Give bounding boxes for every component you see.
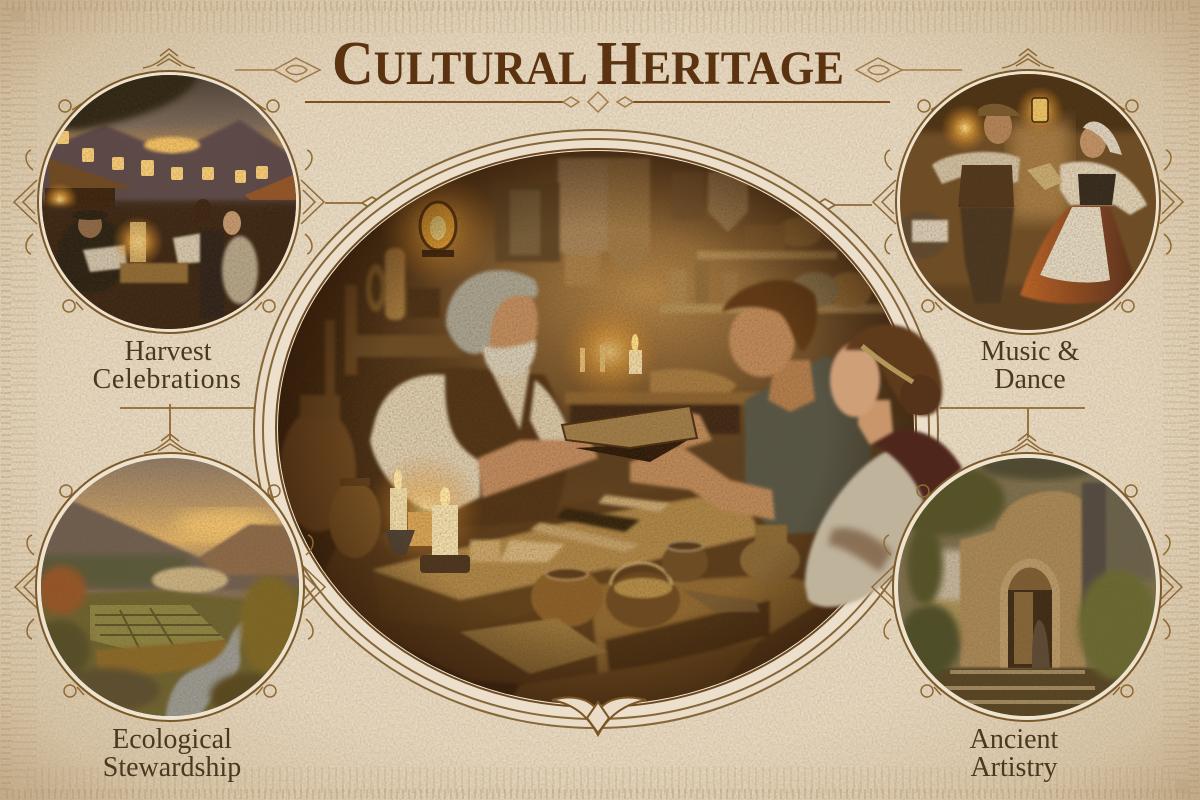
pots and basket on the table (460, 525, 800, 674)
bench candles (580, 334, 642, 374)
ornaments: music circle (873, 49, 1183, 312)
hanging tools (325, 248, 462, 410)
carved box (562, 406, 697, 462)
bottom ornament of the central frame (552, 698, 646, 735)
jars on left (280, 395, 356, 532)
old man (370, 270, 598, 530)
label: harvest celebrations: Celebrations (93, 364, 241, 395)
label: ecological stewardship: Stewardship (103, 752, 241, 783)
painterly grain (278, 151, 914, 670)
label: ancient artistry: Artistry (970, 752, 1058, 783)
table tools (470, 495, 670, 562)
frame connectors between the circles and the central scene (120, 197, 1085, 440)
lantern (420, 202, 456, 257)
ornaments: ancient circle (872, 434, 1182, 697)
scene vignette (278, 151, 914, 705)
table candles (329, 452, 483, 573)
panel: central scene frame (254, 130, 938, 728)
lantern glow (386, 180, 489, 279)
panel: ecological stewardship (15, 434, 325, 721)
label: ecological stewardship: Ecological (112, 724, 232, 755)
label: music and dance: Dance (994, 364, 1066, 395)
panel: harvest celebrations (14, 49, 324, 335)
title flourishes (235, 58, 962, 112)
shelves and pottery (660, 217, 892, 313)
young man (630, 280, 871, 535)
back bench (565, 369, 760, 434)
hanging textiles (495, 158, 748, 286)
label: music and dance: Music & (981, 336, 1079, 367)
candle glow on the bench (567, 312, 652, 394)
ornaments: harvest circle (14, 49, 324, 312)
panel: music and dance (873, 49, 1183, 335)
label: harvest celebrations: Harvest (124, 336, 212, 367)
table (324, 496, 841, 705)
title: CULTURAL HERITAGE (332, 30, 844, 98)
panel: central workshop scene (270, 140, 930, 720)
panel: ancient artistry (872, 434, 1182, 724)
label: ancient artistry: Ancient (970, 724, 1058, 755)
ornaments: ecological circle (15, 434, 325, 697)
young woman overlapping the frame (805, 324, 962, 607)
